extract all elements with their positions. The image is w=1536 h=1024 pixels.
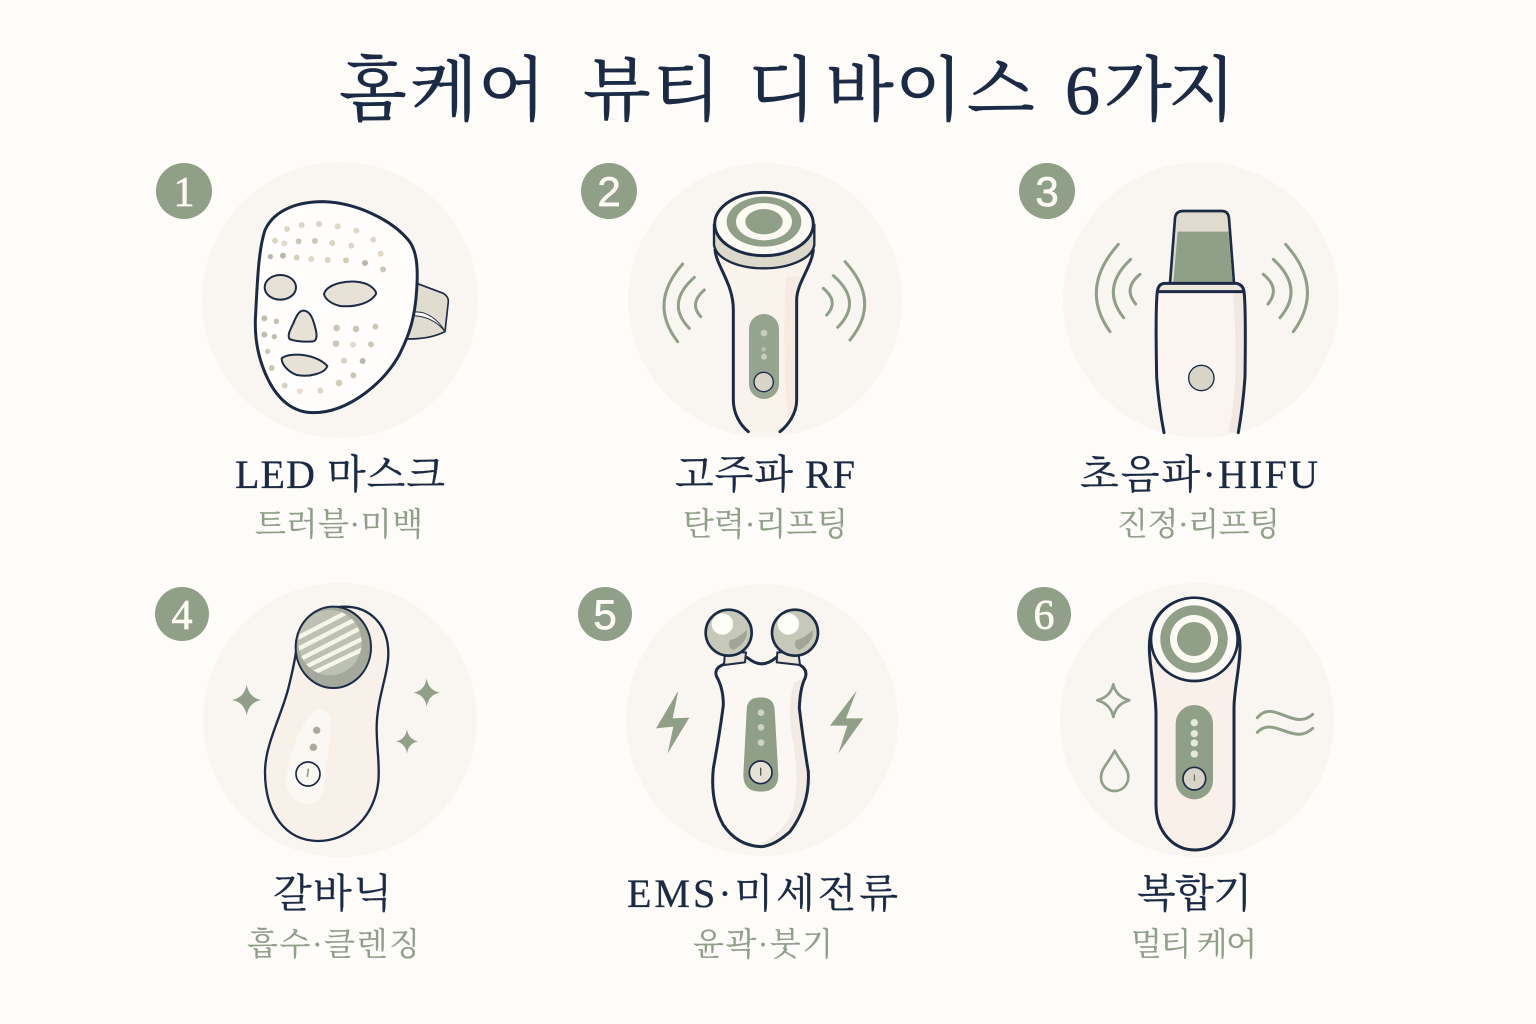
label: LED 마스크: LED 마스크	[235, 452, 445, 497]
panel: multi device	[1017, 583, 1334, 962]
background circle 4	[203, 583, 477, 857]
background circle 1	[202, 162, 478, 438]
label: 복합기: 복합기	[1137, 871, 1252, 916]
number badge 4: 4	[172, 593, 192, 639]
background circle 5	[626, 584, 898, 856]
icon: multi-function device	[1097, 598, 1313, 850]
number badge 1	[156, 163, 212, 219]
label: 고주파 RF: 고주파 RF	[675, 452, 855, 497]
icon: EMS twin roller device	[656, 610, 863, 847]
label: 갈바닉: 갈바닉	[273, 871, 392, 916]
panel: RF device	[581, 163, 902, 542]
sublabel: 진정·리프팅: 진정·리프팅	[1117, 506, 1280, 542]
sublabel: 트러블·미백: 트러블·미백	[255, 506, 423, 542]
panel: galvanic	[155, 587, 440, 959]
background circle 2	[628, 163, 902, 437]
number badge 1: 1	[174, 170, 194, 216]
number badge 6: 6	[1034, 593, 1054, 639]
icon: ultrasonic scrubber	[1096, 211, 1307, 433]
number badge 5: 5	[593, 591, 617, 638]
label: EMS·미세전류: EMS·미세전류	[627, 871, 898, 916]
sublabel: 윤곽·붓기: 윤곽·붓기	[693, 926, 833, 962]
icon: galvanic device	[232, 607, 440, 841]
number badge 4	[155, 587, 209, 641]
panel: EMS	[578, 584, 898, 962]
number badge 3	[1019, 163, 1075, 219]
label: 초음파·HIFU: 초음파·HIFU	[1080, 452, 1318, 497]
number badge 6	[1017, 587, 1071, 641]
icon: RF handheld device	[664, 192, 865, 432]
number badge 5	[578, 587, 632, 641]
number badge 2: 2	[597, 168, 621, 215]
sublabel: 흡수·클렌징: 흡수·클렌징	[247, 926, 420, 962]
icon: LED face mask	[255, 202, 448, 413]
panel: LED mask	[156, 162, 478, 542]
sublabel: 탄력·리프팅: 탄력·리프팅	[683, 506, 848, 542]
sublabel: 멀티 케어: 멀티 케어	[1131, 926, 1257, 962]
title: 홈케어 뷰티 디바이스 6가지	[339, 53, 1236, 130]
number badge 2	[581, 163, 637, 219]
number badge 3: 3	[1035, 168, 1059, 215]
background circle 3	[1063, 162, 1339, 438]
background circle 6	[1060, 583, 1334, 857]
panel: ultrasound HIFU	[1019, 162, 1339, 542]
